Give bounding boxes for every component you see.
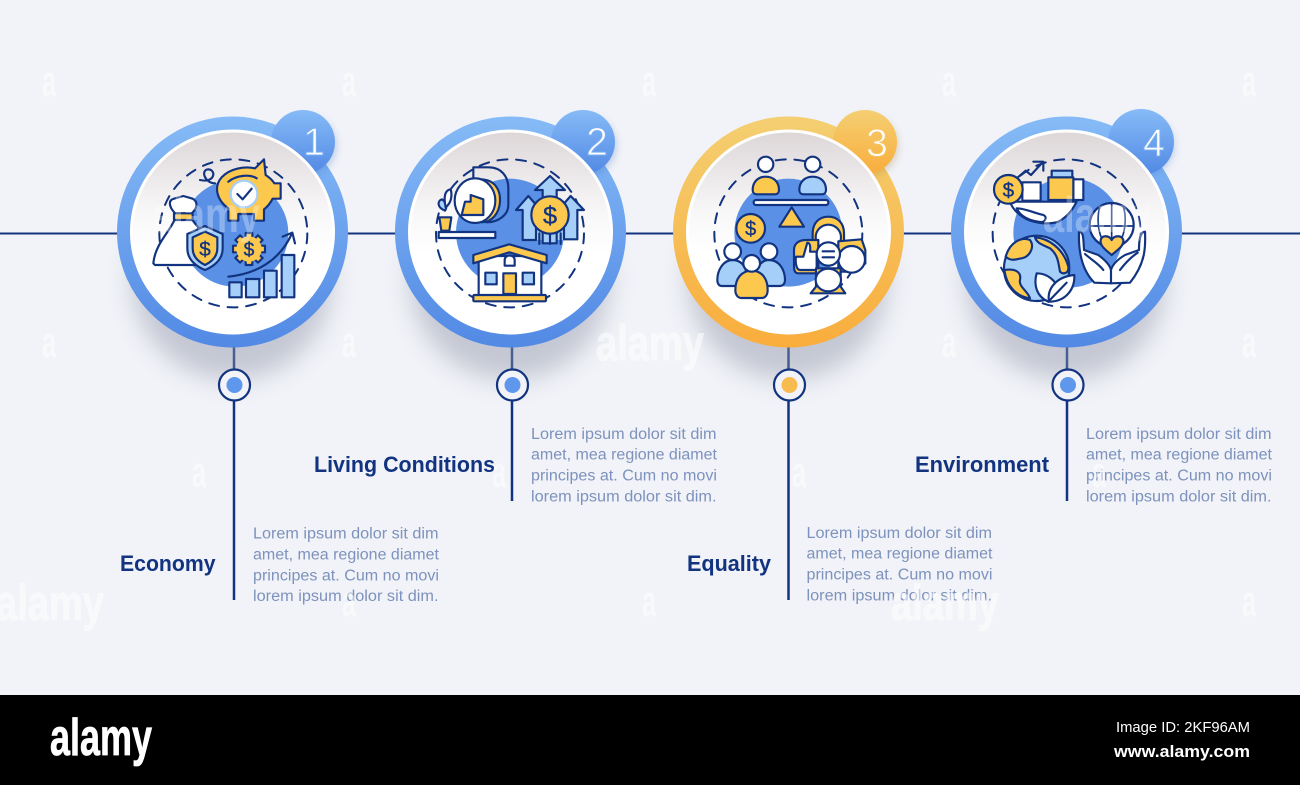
footer logo: alamy xyxy=(50,709,152,767)
watermarks: a xyxy=(942,318,956,367)
watermarks: alamy xyxy=(1043,187,1151,243)
watermarks: alamy xyxy=(0,575,104,631)
watermarks: a xyxy=(1242,577,1256,626)
panel: step 2 living conditions xyxy=(314,110,718,506)
text block 3 xyxy=(806,525,993,604)
icon: equality xyxy=(714,157,865,307)
inner disc 2 xyxy=(410,131,612,333)
watermarks: a xyxy=(1092,448,1106,497)
icon: economy xyxy=(153,159,307,307)
text block 2: principes at. Cum no movi xyxy=(531,468,717,484)
website: www.alamy.com xyxy=(1113,742,1250,761)
text block 2: amet, mea regione diamet xyxy=(531,446,718,464)
icon: living conditions: $ xyxy=(543,202,557,230)
text block 1 xyxy=(253,526,440,605)
watermarks: a xyxy=(642,57,656,106)
heading: equality: Equality xyxy=(687,551,772,576)
watermarks: alamy xyxy=(152,187,260,243)
image id: Image ID: 2KF96AM xyxy=(1116,719,1250,736)
number badge 2 xyxy=(551,110,616,176)
heading: living conditions: Living Conditions xyxy=(314,452,495,477)
circle shadow 3 xyxy=(688,180,888,380)
circle shadow 2 xyxy=(410,180,610,380)
watermarks: a xyxy=(342,57,356,106)
watermarks: a xyxy=(42,318,56,367)
watermarks: a xyxy=(492,448,506,497)
icon: living conditions xyxy=(436,159,584,307)
watermarks: alamy xyxy=(891,575,999,631)
number badge 3 xyxy=(833,110,898,176)
node 1 xyxy=(219,370,250,400)
text block 4: principes at. Cum no movi xyxy=(1086,468,1272,484)
panel: step 3 equality xyxy=(673,110,993,604)
text block 1: principes at. Cum no movi xyxy=(253,568,439,584)
number badge 4 xyxy=(1108,109,1174,176)
icon: economy: $ xyxy=(244,240,255,261)
text block 2: lorem ipsum dolor sit dim. xyxy=(531,488,716,506)
ring 3 xyxy=(673,116,904,348)
text block 4: Lorem ipsum dolor sit dim xyxy=(1086,426,1272,443)
text block 3: lorem ipsum dolor sit dim. xyxy=(806,588,992,604)
connector line 4 xyxy=(1066,345,1068,501)
text block 1: amet, mea regione diamet xyxy=(253,546,440,564)
text block 4: lorem ipsum dolor sit dim. xyxy=(1086,488,1272,506)
heading: economy: Economy xyxy=(120,551,216,576)
number badge 2: 2 xyxy=(586,121,608,164)
text block 1: lorem ipsum dolor sit dim. xyxy=(253,588,438,605)
watermarks: a xyxy=(342,318,356,367)
text block 4 xyxy=(1086,426,1273,506)
circle shadow 1 xyxy=(132,180,332,380)
watermarks: a xyxy=(342,577,356,626)
watermarks: alamy xyxy=(596,315,704,371)
inner disc 3 xyxy=(688,131,890,333)
text block 3: principes at. Cum no movi xyxy=(806,566,992,584)
inner disc 4 xyxy=(966,131,1168,333)
panel: step 4 environment xyxy=(915,109,1273,506)
horizontal timeline xyxy=(0,232,1300,234)
text block 2 xyxy=(531,426,718,506)
text block 2: Lorem ipsum dolor sit dim xyxy=(531,426,716,443)
icon: economy: $ xyxy=(199,238,211,261)
connector line 2 xyxy=(511,345,513,501)
watermarks: a xyxy=(192,448,206,497)
watermarks: a xyxy=(42,57,56,106)
watermarks xyxy=(0,57,1256,631)
number badge 1: 1 xyxy=(303,121,325,164)
ring 1 xyxy=(117,116,348,348)
node 3 xyxy=(774,370,805,400)
number badge 3: 3 xyxy=(866,122,888,165)
watermarks: a xyxy=(792,448,806,497)
watermarks: a xyxy=(942,57,956,106)
text block 3: Lorem ipsum dolor sit dim xyxy=(806,525,992,542)
watermarks: a xyxy=(1242,318,1256,367)
circle shadow 4 xyxy=(966,180,1166,380)
icon: environment: $ xyxy=(1003,179,1015,202)
number badge 1 xyxy=(271,110,336,176)
node 4 xyxy=(1052,370,1084,400)
text block 1: Lorem ipsum dolor sit dim xyxy=(253,526,438,542)
ring 2 xyxy=(395,116,626,348)
watermarks: a xyxy=(642,577,656,626)
panel: step 1 economy xyxy=(117,110,440,605)
watermarks: a xyxy=(1242,57,1256,106)
text block 3: amet, mea regione diamet xyxy=(806,546,993,562)
heading: environment: Environment xyxy=(915,452,1050,477)
connector line 3 xyxy=(787,345,790,600)
icon: environment xyxy=(993,159,1145,307)
number badge 4: 4 xyxy=(1143,122,1165,165)
node 2 xyxy=(497,370,528,400)
icon: equality: $ xyxy=(745,219,756,241)
connector line 1 xyxy=(233,345,235,600)
text block 4: amet, mea regione diamet xyxy=(1086,446,1273,464)
footer bar xyxy=(0,695,1300,785)
ring 4 xyxy=(951,116,1182,348)
inner disc 1 xyxy=(132,131,334,333)
